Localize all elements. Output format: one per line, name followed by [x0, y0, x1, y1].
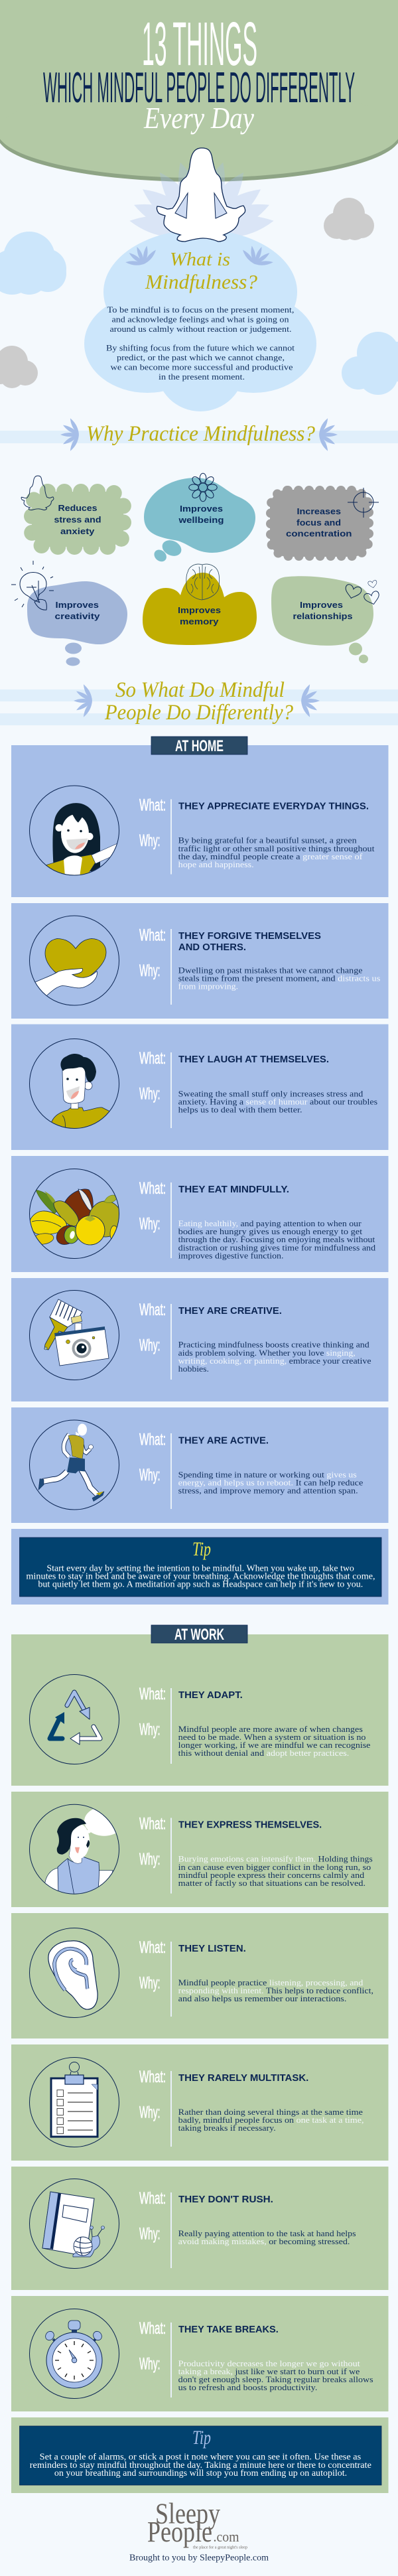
header banner	[0, 0, 398, 182]
text: improves wellbeing	[178, 504, 224, 525]
tip text: Start every day by setting the intention to be mindful. When you wake up, take two	[46, 1563, 354, 1573]
why text: from improving.	[178, 981, 238, 991]
tip text: on your breathing and surroundings will stop you from ending up on autopilot.	[54, 2468, 347, 2478]
icon: recycle arrows	[29, 1675, 119, 1764]
heading: why practice mindfulness: Why Practice Mindfulness?	[86, 422, 315, 446]
card: they are creative	[11, 1278, 389, 1401]
why text: Sweating the small stuff only increases stress and	[178, 1088, 364, 1098]
card: they are active	[11, 1407, 389, 1523]
label: what: What:	[139, 926, 166, 945]
label: why: Why:	[139, 2224, 161, 2243]
icon: lotus right	[238, 240, 278, 272]
text: improves relationships	[293, 600, 353, 621]
label: why: Why:	[139, 1973, 161, 1992]
icon: runner	[29, 1420, 119, 1510]
text: improves memory	[178, 605, 221, 626]
what heading: THEY FORGIVE THEMSELVES	[178, 931, 321, 942]
icon: heart in hand	[28, 916, 119, 1005]
why text: through the day. Focusing on enjoying meals without	[178, 1234, 375, 1244]
cloud: grey left	[0, 346, 38, 388]
cloud: blue right	[342, 332, 398, 395]
what heading	[178, 931, 321, 953]
text: reduces stress: Reduces	[58, 503, 97, 513]
what heading: THEY ARE ACTIVE.	[178, 1436, 269, 1447]
why text: Mindful people are more aware of when changes	[178, 1724, 363, 1734]
why text: Eating healthily, and paying attention to when our	[178, 1218, 362, 1228]
title: Every Day	[143, 101, 254, 135]
bubble: improves relationships	[271, 576, 381, 664]
why text: traffic light or other small positive things throughout	[178, 843, 375, 853]
icon: ear	[29, 1928, 119, 2017]
why text: Mindful people practice listening, processing, and	[178, 1977, 364, 1987]
why text: By being grateful for a beautiful sunset, a green	[178, 835, 357, 845]
why text	[178, 2228, 356, 2246]
label: what: What:	[139, 1179, 166, 1198]
icon: lotus right	[317, 417, 338, 452]
text: mindfulness definition: we can become more successful and productive	[110, 362, 293, 372]
tip text: Set a couple of alarms, or stick a post it note where you can see it often. Use these as	[40, 2452, 361, 2462]
icon: lotus left	[60, 417, 81, 452]
heading: so what do mindful people do differently: People Do Differently?	[104, 701, 293, 725]
lotus behind figure	[128, 159, 275, 242]
bubble: improves wellbeing	[144, 473, 255, 564]
why text: longer working, if we are mindful we can recognise	[178, 1740, 371, 1750]
label: why: Why:	[139, 1720, 161, 1739]
what heading: THEY ARE CREATIVE.	[178, 1306, 282, 1317]
icon: clipboard checklist	[29, 2057, 119, 2147]
text: increases focus	[286, 506, 352, 539]
label: what: What:	[139, 1938, 166, 1957]
text: mindfulness definition: predict, or the past which we cannot change,	[117, 352, 285, 362]
label: why: Why:	[139, 831, 161, 850]
text: improves wellbeing: Improves	[180, 504, 223, 514]
what heading: THEY TAKE BREAKS.	[178, 2325, 279, 2335]
what heading: THEY ADAPT.	[178, 1690, 243, 1701]
why text	[178, 2358, 373, 2392]
bubble: increases focus	[270, 488, 379, 557]
why text	[178, 835, 375, 869]
tip text: minutes to stay in bed and be aware of your breathing. Acknowledge the thoughts that come,	[26, 1571, 375, 1581]
why text	[178, 1088, 377, 1115]
text: reduces stress	[54, 503, 101, 536]
why text: distraction or rushing gives time for mindfulness and	[178, 1242, 376, 1252]
text: increases focus: focus and	[297, 518, 341, 528]
label: what: What:	[139, 2319, 166, 2338]
why text: energy, and helps us to reboot. It can help reduce	[178, 1478, 364, 1488]
cloud: blue left	[0, 232, 66, 295]
label: why: Why:	[139, 1084, 161, 1103]
text: improves creativity	[54, 600, 100, 621]
heading: why practice mindfulness	[0, 417, 398, 452]
why text: Spending time in nature or working out gives us	[178, 1469, 357, 1480]
why text: hobbies.	[178, 1364, 209, 1374]
tip text	[26, 1563, 375, 1589]
card: they eat mindfully	[11, 1156, 389, 1272]
bubble: improves creativity	[11, 561, 127, 666]
why text: Practicing mindfulness boosts creative thinking and	[178, 1340, 369, 1350]
icon: lotus right	[299, 683, 320, 718]
icon: lotus left	[74, 683, 94, 718]
tip card: at home	[11, 1529, 389, 1605]
icon: stopwatch	[29, 2309, 119, 2398]
bubble: reduces stress	[21, 476, 123, 547]
why text: helps us to deal with them better.	[178, 1104, 302, 1115]
text: improves memory: memory	[180, 616, 219, 626]
card: they listen	[11, 1913, 389, 2039]
label: what: What:	[139, 1049, 166, 1068]
what heading: AND OTHERS.	[178, 942, 246, 953]
card: they forgive themselves and others	[11, 903, 389, 1019]
tip title: Tip	[192, 1538, 211, 1560]
text: improves creativity: creativity	[54, 611, 100, 621]
bubble: improves memory	[143, 564, 257, 645]
why text: writing, cooking, or painting, embrace your creative	[178, 1356, 371, 1366]
text: improves creativity: Improves	[56, 600, 99, 610]
label: why: Why:	[139, 1214, 161, 1233]
logo: SleepyPeople.com: People	[147, 2516, 212, 2548]
what heading: THEY EXPRESS THEMSELVES.	[178, 1820, 322, 1831]
text: mindfulness definition	[106, 305, 295, 382]
why text	[178, 1218, 376, 1260]
logo: SleepyPeople.com: the place for a great night's sleep	[193, 2545, 247, 2550]
tip text: reminders to stay mindful throughout the day. Taking a minute here or there to concentrate	[30, 2460, 371, 2470]
text: increases focus: concentration	[286, 528, 352, 539]
text: reduces stress: anxiety	[60, 526, 95, 536]
why text: aids problem solving. Whether you love singing,	[178, 1348, 356, 1358]
heading: what is mindfulness	[145, 250, 257, 293]
why text: avoid making mistakes, or becoming stressed.	[178, 2236, 350, 2246]
icon: woman pointing	[29, 786, 119, 877]
why text: bodies are hungry gives us enough energy to get	[178, 1226, 363, 1236]
text: mindfulness definition: By shifting focus from the future which we cannot	[106, 342, 295, 353]
why text	[178, 1340, 371, 1374]
why text: Really paying attention to the task at hand helps	[178, 2228, 356, 2238]
heading: what is mindfulness: Mindfulness?	[145, 270, 257, 293]
label: why: Why:	[139, 2104, 161, 2122]
icon: camera and paintbrush	[29, 1290, 119, 1380]
section banner: at home: AT HOME	[175, 737, 224, 755]
heading: so what do mindful people do differently	[0, 678, 398, 725]
why text: responding with intent. This helps to reduce conflict,	[178, 1985, 373, 1995]
text: mindfulness definition: around us calmly without reaction or judgement.	[110, 324, 292, 334]
heading: so what do mindful people do differently: So What Do Mindful	[115, 678, 285, 702]
why text: Productivity decreases the longer we go without	[178, 2358, 360, 2368]
what heading: THEY EAT MINDFULLY.	[178, 1184, 289, 1195]
icon: lotus left	[121, 240, 161, 272]
text: improves relationships: Improves	[300, 600, 343, 610]
label: why: Why:	[139, 1466, 161, 1484]
icon: light bulb	[11, 561, 54, 610]
icon: flower	[189, 473, 217, 502]
why text	[178, 1724, 371, 1758]
section banner: at work: AT WORK	[174, 1626, 224, 1644]
label: why: Why:	[139, 2354, 161, 2373]
why text: need to be made. When a system or situation is no	[178, 1732, 366, 1742]
label: why: Why:	[139, 1850, 161, 1869]
text: mindfulness definition: and acknowledge feelings and what is going on	[111, 315, 289, 324]
what heading: THEY LAUGH AT THEMSELVES.	[178, 1054, 329, 1065]
card: they take breaks	[11, 2296, 389, 2411]
tip text: but quietly let them go. A meditation app such as Headspace can help if it's new to you.	[38, 1579, 363, 1589]
card: they don't rush	[11, 2167, 389, 2290]
tip card: at work	[11, 2417, 389, 2493]
why text: matter of factly so that situations can be resolved.	[178, 1878, 365, 1888]
why text: in can cause even bigger conflict in the long run, so	[178, 1862, 371, 1872]
why text: Dwelling on past mistakes that we cannot change	[178, 965, 363, 975]
why text: and also helps us remember our interactions.	[178, 1993, 346, 2003]
why text: us to refresh and boosts productivity.	[178, 2382, 317, 2392]
why text: Rather than doing several things at the same time	[178, 2107, 363, 2117]
card: they express themselves	[11, 1792, 389, 1907]
label: what: What:	[139, 2068, 166, 2086]
text: improves memory: Improves	[178, 605, 221, 615]
icon: notebook and snail	[29, 2179, 119, 2268]
label: why: Why:	[139, 1336, 161, 1355]
what heading: THEY LISTEN.	[178, 1944, 246, 1954]
why text	[178, 965, 380, 991]
why text: anxiety. Having a sense of humour about our troubles	[178, 1096, 377, 1106]
why text: taking a break, just like we start to burn out if we	[178, 2366, 360, 2376]
title	[43, 9, 355, 135]
icon: fruit	[29, 1169, 122, 1258]
label: what: What:	[139, 796, 166, 815]
why text: stress, and improve memory and attention span.	[178, 1486, 358, 1496]
text: mindfulness definition: in the present moment.	[159, 372, 245, 382]
meditating figure	[157, 148, 245, 242]
label: what: What:	[139, 2189, 166, 2208]
cloud: grey top right	[324, 198, 374, 240]
label: what: What:	[139, 1431, 166, 1449]
why text	[178, 1977, 373, 2003]
label: what: What:	[139, 1301, 166, 1319]
icon: target	[348, 488, 379, 518]
card: they appreciate everyday things	[11, 745, 389, 897]
what heading: THEY APPRECIATE EVERYDAY THINGS.	[178, 802, 369, 812]
why text: taking breaks if necessary.	[178, 2123, 276, 2133]
icon: meditator outline	[21, 476, 54, 510]
label: what: What:	[139, 1685, 166, 1703]
text: increases focus: Increases	[297, 506, 341, 516]
logo: SleepyPeople.com: .com	[214, 2528, 239, 2545]
icon: laughing man	[29, 1039, 119, 1131]
why text	[178, 1854, 373, 1888]
label: why: Why:	[139, 962, 161, 980]
why text: improves digestive function.	[178, 1250, 284, 1260]
why text	[178, 2107, 364, 2133]
label: what: What:	[139, 1815, 166, 1833]
why text: hope and happiness.	[178, 859, 254, 869]
card: they laugh at themselves	[11, 1025, 389, 1150]
icon: woman with thought bubble	[29, 1804, 124, 1896]
cloud: what is mindfulness panel	[84, 230, 316, 411]
what heading: THEY RARELY MULTITASK.	[178, 2073, 308, 2084]
text: improves relationships: relationships	[293, 611, 353, 621]
why text: this without denial and adopt better practices.	[178, 1748, 349, 1758]
what heading: THEY DON'T RUSH.	[178, 2194, 273, 2205]
why text: Burying emotions can intensify them. Holding things	[178, 1854, 373, 1864]
logo: SleepyPeople.com	[147, 2498, 247, 2550]
heading: what is mindfulness: What is	[170, 250, 230, 270]
icon: hearts	[344, 580, 381, 606]
icon: brain	[186, 564, 220, 600]
why text: badly, mindful people focus on one task at a time,	[178, 2115, 364, 2125]
text: mindfulness definition: To be mindful is to focus on the present moment,	[107, 305, 295, 315]
tip title: Tip	[192, 2427, 211, 2449]
card: they rarely multitask	[11, 2044, 389, 2161]
logo: SleepyPeople.com: Sleepy	[155, 2498, 220, 2530]
why text: don't get enough sleep. Taking regular breaks allows	[178, 2374, 373, 2384]
credit line: Brought to you by SleepyPeople.com	[129, 2553, 269, 2563]
card: they adapt	[11, 1634, 389, 1786]
why text: mindful people express their concerns calmly and	[178, 1870, 365, 1880]
why text: the day, mindful people create a greater sense of	[178, 851, 363, 861]
tip text	[30, 2452, 371, 2478]
text: reduces stress: stress and	[54, 515, 101, 524]
why text: steals time from the present moment, and distracts us	[178, 973, 380, 983]
why text	[178, 1469, 364, 1496]
text: improves wellbeing: wellbeing	[178, 515, 224, 525]
